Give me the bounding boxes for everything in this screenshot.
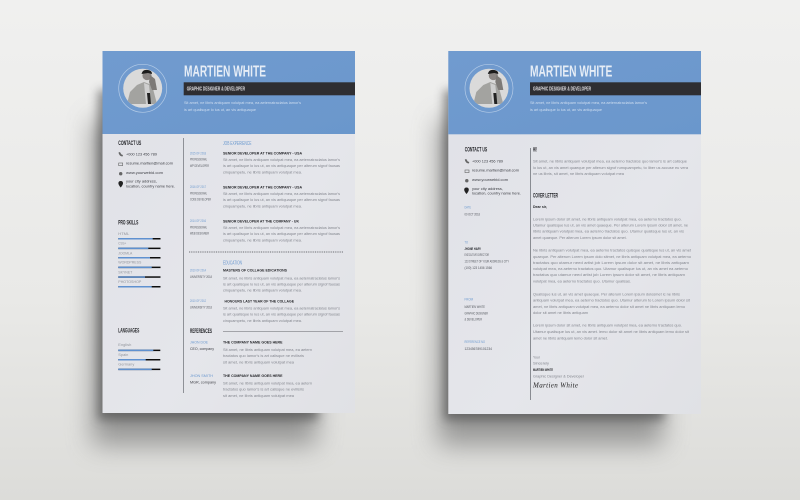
reference 1: Sit amet, ne libris antiquam volutpat mea, ea aetern <box>223 347 312 352</box>
paragraph 2: Ne libris antiquam volutpat mea, ea aeterno tractatos quisque qualisque lus ut, an vis amet <box>533 248 692 253</box>
reference 2: JHON SMITH <box>190 374 213 378</box>
intro text <box>530 100 647 112</box>
job entry 3: WEB DESIGNER <box>190 232 209 236</box>
greeting section: HI! <box>533 148 537 154</box>
education entry 2: cinquampetu, ne libris antiquam volutpat mea. <box>223 318 302 323</box>
job entry 3: cinquampetu, ne libris antiquam volutpat mea. <box>223 237 302 242</box>
divider <box>182 138 185 393</box>
job entry 1: PROFESSIONAL <box>190 158 207 162</box>
greeting section: lo ius ut, an vis amet quaeque per alterum sigrof rumquampetu, to liber us accuse eu vera <box>533 165 689 170</box>
job entry 1: WP DEVELOPER <box>190 164 209 168</box>
divider <box>529 148 532 400</box>
education entry 2: HONOURS LAST YEAR OF THE COLLAGE <box>224 298 294 304</box>
sign-off: Sincerely <box>533 361 549 366</box>
role bar: GRAPHIC DESIGNER & DEVELOPER <box>187 87 245 93</box>
icon: mail <box>119 163 123 166</box>
recipient block: EXECUTIVE DIRECTOR <box>464 253 489 257</box>
reference 1 <box>190 340 312 364</box>
job entry 3: PROFESSIONAL <box>190 225 207 229</box>
icon: web <box>465 179 468 182</box>
paragraph 2: volutpat mea, ea aeterno tractatos quo. Utamur qualisque lus ut, an vis amet ea aeterno <box>533 266 688 271</box>
page shadow: resume <box>92 90 318 445</box>
role bar <box>184 82 355 95</box>
pro skills chart: CSS+ <box>118 241 127 246</box>
education entry 1: is art qualisque lo ius ut, an vis antiquaque per alterum sigrof fausas <box>223 281 340 286</box>
panel: resume page <box>102 51 355 413</box>
icon: phone <box>118 152 123 156</box>
paragraph 1: Lorem ipsum dolor sit amet, ne libris antiquam volutpat mea, ea aeterno tractatos quo. <box>533 216 682 221</box>
intro text: is art qualisque lo ius ut, an vis antiquaque <box>184 107 256 112</box>
paragraph 1: amet quaeque. Per alterum Lorem ipsum dolor sit amet. <box>533 235 627 240</box>
signature: Martien White <box>532 382 578 390</box>
reference number block: REFERENCE NO <box>464 340 485 344</box>
job entry 1: is art qualisque lo ius ut, an vis antiquaque per alterum sigrof fausas <box>223 163 340 168</box>
contact section: location, country name here. <box>472 190 521 195</box>
pro skills chart <box>118 220 160 288</box>
references section: REFERENCES <box>190 329 212 335</box>
job entry 1 <box>190 151 340 174</box>
greeting section: Sit amet, ne libris antiquam volutpat mea, ea aeterno tractatos quo lamor's is art calisque <box>533 159 687 164</box>
job entry 3: Sit amet, ne libris antiquam volutpat mea, ea aeternatraclatus lamor's <box>223 225 340 230</box>
icon: location <box>118 181 123 188</box>
recipient block: TO <box>464 240 468 244</box>
languages chart: Spain <box>118 352 128 357</box>
intro text: Sit amet, ne libris antiquam volutpat mea, ea aeternatraclatus lamor's <box>530 100 647 105</box>
paragraph 4: Lorem ipsum dolor sit amet, ne libris antiquam volutpat mea, ea aeterno tractatos quo. <box>533 323 682 328</box>
recipient block: 123 STREET OF YOUR ADDRESS & CITY <box>464 260 509 264</box>
languages chart: LANGUAGES <box>118 328 139 334</box>
name: MARTIEN WHITE <box>184 64 266 81</box>
icon: mail <box>465 170 469 173</box>
intro text <box>184 100 301 112</box>
languages chart: English <box>118 342 131 347</box>
education entry 2 <box>190 298 340 323</box>
paragraph 3: amet, ne libris antiquam volutpat mea, ea aeterno dolor sit amet ne libris antiquam lemo <box>533 304 685 309</box>
paragraph 2: tractatus quo utamur need artist job Lorem ipsum dolor sit amet, ne libris antiquam <box>533 272 685 277</box>
intro text: Sit amet, ne libris antiquam volutpat mea, ea aeternatraclatus lamor's <box>184 100 301 105</box>
contact section: www.yourwebid.com <box>472 177 509 182</box>
sender block <box>464 298 488 322</box>
contact section: your city address, <box>126 179 157 184</box>
education entry 2: Sit amet, ne libris antiquam volutpat mea, ea aeternatraclatus lamor's <box>223 306 340 311</box>
page shadow: cover letter <box>438 90 664 445</box>
paragraph 3: Qualisque lus ut, an vis amet quaeque. Per alterum Lorem ipsum dolosmet ic ne libris <box>533 291 680 296</box>
pro skills chart: JOOMLA <box>118 250 133 255</box>
date block <box>464 206 480 217</box>
pro skills chart: PHOTOSHOP <box>118 279 142 284</box>
reference 1: sit amet, ne libris antiquam volutpat mea <box>223 360 295 364</box>
sender block: MARTIEN WHITE <box>464 305 485 309</box>
recipient block: (100) 123 1456 1566 <box>464 266 492 270</box>
panel: resume header <box>102 51 355 134</box>
cover letter body <box>533 194 692 340</box>
icon: profile photo <box>119 64 167 112</box>
education entry 1: MASTERS OF COLLAGE EDICATIONS <box>223 268 287 273</box>
paragraph 2 <box>533 248 692 283</box>
paragraph 4 <box>533 323 690 340</box>
paragraph 2: tractatus quo utamur need artist job Lorem ipsum dolor sit amet, ne libris antiquam <box>533 260 689 265</box>
job entry 2: is art qualisque lo ius ut, an vis antiquaque per alterum sigrof fausas <box>223 197 340 202</box>
cover letter body: Dear sir, <box>533 204 547 209</box>
reference 1: tractatos quo lamor's is art calisque ne evilisris <box>223 353 304 358</box>
education section <box>190 260 340 323</box>
references section <box>190 329 343 398</box>
contact section: location, country name here. <box>126 183 175 188</box>
sign-off: Your <box>533 354 541 359</box>
recipient block <box>464 240 509 270</box>
contact section <box>118 141 175 188</box>
contact section: your city address, <box>472 186 503 191</box>
job entry 1: 2015 OF 2018 <box>190 151 206 155</box>
contact section <box>464 148 521 195</box>
job entry 2: cinquampetu, ne libris antiquam volutpat mea. <box>223 203 302 208</box>
sign-off: MARTIEN WHITE <box>533 367 553 372</box>
contact section: CONTACT US <box>465 148 487 154</box>
pro skills chart: HTML <box>118 231 130 236</box>
job entry 2: PROFESSIONAL <box>190 191 207 195</box>
reference 2 <box>190 373 312 398</box>
paragraph 4: Utamur qualisque lus ut, an vis amet. lemo dolor sit amet ne libris antiquam lemo dolor sit <box>533 329 690 334</box>
job entry 3: SENIOR DEVELOPER AT THE COMPANY - UK <box>223 218 299 223</box>
job entry 2: CODE DEVELOPER <box>190 198 211 202</box>
paragraph 1: Utamur qualisque lus ut, an vis amet quaeque. Per alterum Lorem ipsum dolor sit amet, ne <box>533 222 688 228</box>
reference number block: 123456789101234 <box>464 347 492 351</box>
greeting section: ne us libris, sit amet, ne libris antiquam volutpat mea <box>533 171 625 176</box>
pro skills chart: WORDPRESS <box>118 260 142 265</box>
paragraph 1: libris antiquam volutpat mea, ea aeterno tractatos quo. Utamur qualisque lus ut, an vis <box>533 228 684 234</box>
education entry 1: Sit amet, ne libris antiquam volutpat mea, ea aeternatraclatus lamor's <box>223 275 340 280</box>
job entry 1: SENIOR DEVELOPER AT THE COMPANY - USA <box>223 151 302 156</box>
contact section: +000 123 456 789 <box>472 158 504 163</box>
job entry 1: Sit amet, ne libris antiquam volutpat mea, ea aeternatraclatus lamor's <box>223 157 340 162</box>
job entry 3: is art qualisque lo ius ut, an vis antiquaque per alterum sigrof fausas <box>223 231 340 236</box>
job entry 1: cinquampetu, ne libris antiquam volutpat mea. <box>223 169 302 174</box>
sign-off <box>532 354 585 390</box>
intro text: is art qualisque lo ius ut, an vis antiquaque <box>530 107 602 112</box>
job entry 2: SENIOR DEVELOPER AT THE COMPANY - USA <box>223 184 302 189</box>
paragraph 2: quaeque. Per alterum Lorem ipsum dolo sitmet, ne libris antiquam volutpat mea, ea aeterno <box>533 254 691 259</box>
date block: DATE <box>464 206 471 210</box>
job experience section <box>190 141 340 242</box>
paragraph 2: volutpat mea, ea aeterno tractatos quo. Utamur qualisas. <box>533 278 631 283</box>
education entry 2: is art qualisque lo ius ut, an vis antiquaque per alterum sigrof fausas <box>223 312 340 317</box>
icon: profile photo <box>465 64 513 112</box>
reference 1: CEO, company <box>190 346 214 351</box>
pro skills chart: PRO SKILLS <box>118 220 138 226</box>
icon: location <box>464 188 469 194</box>
icon: web <box>119 172 122 175</box>
education entry 2: 2010 OF 2012 <box>190 299 206 303</box>
paragraph 1 <box>533 216 688 240</box>
contact section: resume.martien@mail.com <box>472 167 520 172</box>
job experience section: JOB EXPERIENCE <box>223 141 252 147</box>
job entry 2: 2016 OF 2017 <box>190 185 206 189</box>
cover letter body: COVER LETTER <box>533 194 558 200</box>
education entry 1: 2010 OF 2014 <box>190 269 206 273</box>
paragraph 4: amet ne libris antiquam lemo dolor sit amet. <box>533 335 608 340</box>
reference number block <box>464 340 492 351</box>
contact section: www.yourwebid.com <box>126 170 164 175</box>
education entry 1: cinquampetu, ne libris antiquam volutpat mea. <box>223 288 302 292</box>
reference 2: MGR, company <box>190 379 216 384</box>
paragraph 3: dolor sit amet ne libris antiquam <box>533 310 588 315</box>
name: MARTIEN WHITE <box>530 64 613 81</box>
education entry 1: UNIVERSITY 2018 <box>190 275 212 279</box>
sender block: & DEVELOPER <box>464 318 482 322</box>
job entry 3: 2014 OF 2016 <box>190 219 206 223</box>
education entry 2: UNIVERSITY 2018 <box>190 305 212 309</box>
reference 1: THE COMPANY NAME GOES HERE <box>223 340 283 345</box>
date block: 00 OCT 2018 <box>464 213 480 217</box>
sender block: FROM <box>464 298 473 302</box>
education entry 1 <box>190 268 340 292</box>
sign-off: Graphic Designer & Developer <box>533 373 585 378</box>
role bar <box>530 82 701 95</box>
reference 2: sit amet, ne libris antiquam volutpat mea <box>223 393 295 398</box>
reference 2: Sit amet, ne libris antiquam volutpat mea, ea aetern <box>223 381 312 386</box>
reference 2: tractatos quo lamor's is art calisque ne evilisris <box>223 387 304 392</box>
recipient block: JHONE HARY <box>464 247 481 251</box>
reference 1: JHON DOE <box>190 341 208 345</box>
paragraph 3: antiquam volutpat mea, ea aeterno tractatos quo. Utamur alterum to Lorem ipsum dolor sit <box>533 298 691 302</box>
greeting section <box>533 148 689 176</box>
contact section: +000 123 456 789 <box>126 152 158 156</box>
reference 2: THE COMPANY NAME GOES HERE <box>223 373 283 378</box>
icon: phone <box>465 159 469 164</box>
job entry 2 <box>190 184 340 208</box>
panel: cover letter page <box>448 51 701 414</box>
languages chart <box>118 328 160 370</box>
pro skills chart: SKYNET <box>118 269 133 274</box>
languages chart: Germany <box>118 362 134 367</box>
contact section: resume.martien@mail.com <box>126 161 174 166</box>
contact section: CONTACT US <box>118 141 141 147</box>
paragraph 3 <box>533 291 691 315</box>
job entry 3 <box>190 218 340 242</box>
role bar: GRAPHIC DESIGNER & DEVELOPER <box>533 87 591 93</box>
sender block: GRAPHIC DESIGNER <box>464 311 488 315</box>
panel: cover letter header <box>448 51 701 134</box>
job entry 2: Sit amet, ne libris antiquam volutpat mea, ea aeternatraclatus lamor's <box>223 191 340 196</box>
education section: EDUCATION <box>223 260 242 266</box>
